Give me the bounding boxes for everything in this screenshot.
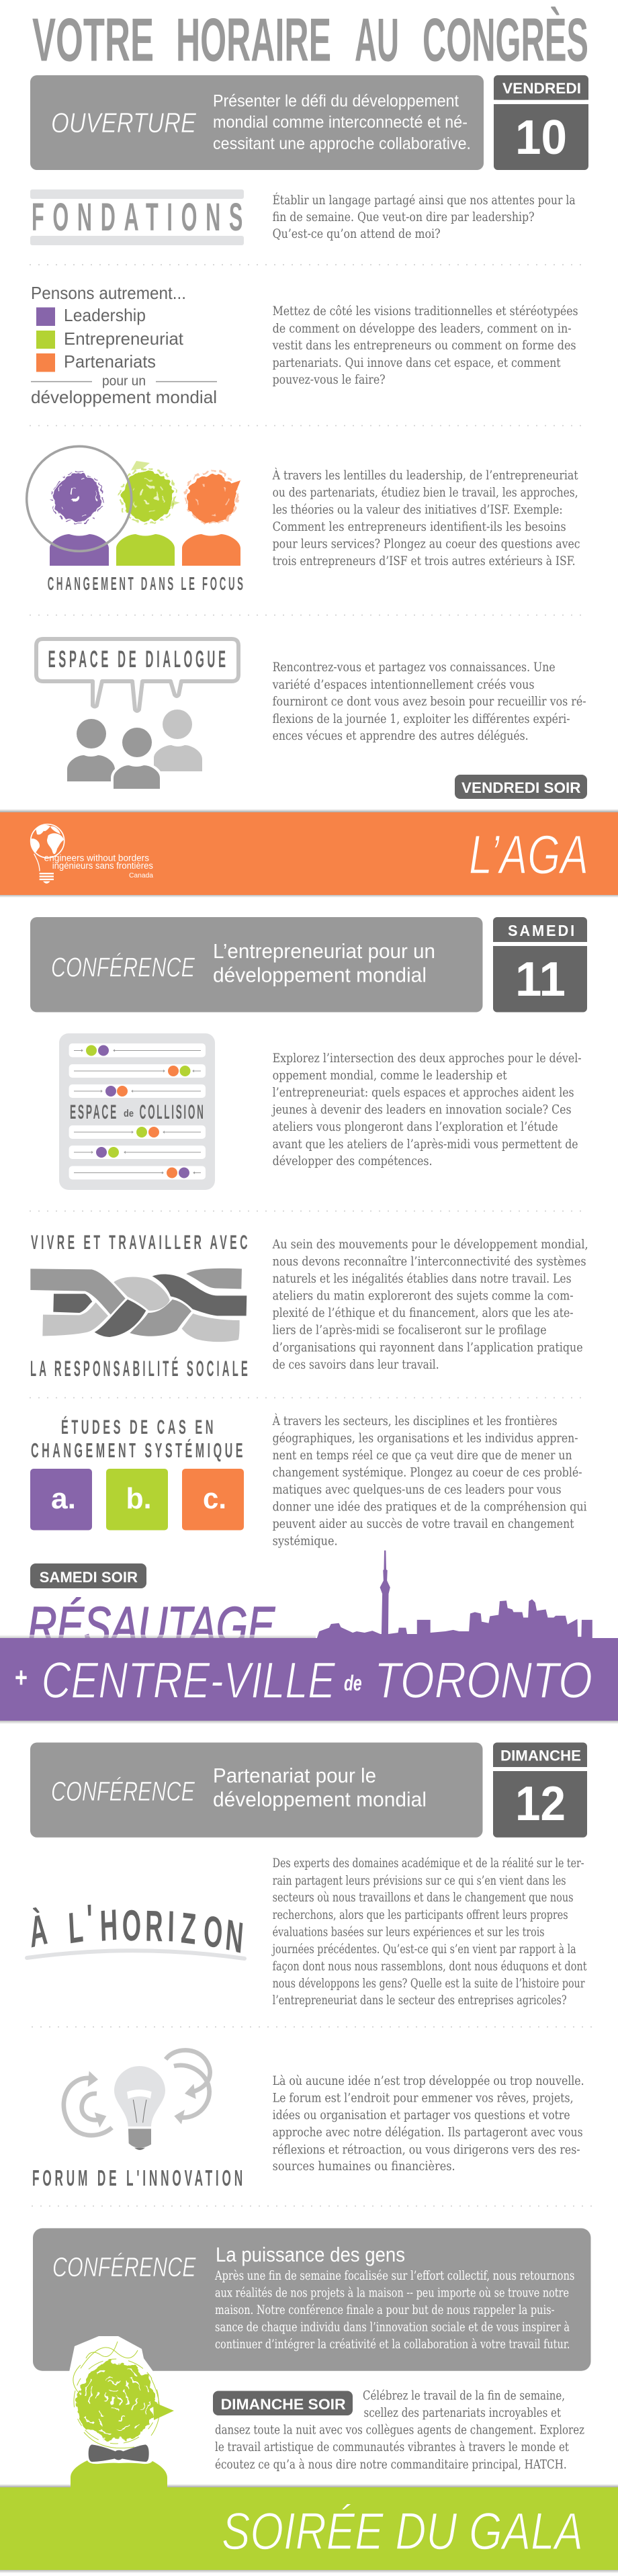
text: dimanche soir: écoutez ce qu’a à nous dire notre commanditaire principal, HATCH. xyxy=(215,2457,567,2472)
collision heading: de xyxy=(124,1108,134,1119)
panel: ouverture xyxy=(30,75,484,170)
text: responsabilité sociale: naturels et les inégalités établies dans notre travail. Les xyxy=(273,1271,572,1286)
text: forum de l'innovation: Là où aucune idée n’est trop développée ou trop nouvelle. xyxy=(273,2073,584,2088)
green body xyxy=(71,2460,167,2487)
band: centre-ville de toronto: CENTRE-VILLE xyxy=(42,1652,336,1709)
text: forum de l'innovation: Le forum est l’endroit pour emmener vos rêves, projets, xyxy=(273,2091,574,2106)
band: l'aga xyxy=(0,809,618,898)
text: à l'horizon: l’entrepreneuriat dans le secteur des entreprises agricoles? xyxy=(273,1993,567,2008)
ouverture label: OUVERTURE xyxy=(51,107,197,138)
ouverture description: mondial comme interconnecté et né- xyxy=(213,113,468,132)
date: dimanche 12: 12 xyxy=(515,1777,566,1831)
ouverture description: Présenter le défi du développement xyxy=(213,91,459,110)
text: à l'horizon: recherchons, alors que les participants offrent leurs propres xyxy=(273,1907,568,1922)
box c xyxy=(182,1469,244,1531)
purple person xyxy=(50,472,109,566)
text: responsabilité sociale: Au sein des mouvements pour le développement mondial, xyxy=(272,1237,588,1252)
legend item: partenariats: Partenariats xyxy=(64,351,156,372)
band: centre-ville de toronto: de xyxy=(344,1671,362,1695)
logo: engineers without borders xyxy=(31,824,153,884)
panel: conférence samedi xyxy=(30,917,482,1012)
text: pensons autrement: vestit dans les entrepreneurs ou comment on forme des xyxy=(272,338,576,353)
panel: la puissance des gens xyxy=(33,2228,591,2371)
text: forum de l'innovation: approche avec notre délégation. Ils partageront avec vous xyxy=(273,2125,583,2140)
badge: dimanche soir xyxy=(213,2391,353,2415)
case study boxes xyxy=(30,1469,244,1531)
collision heading: ESPACE xyxy=(70,1101,118,1123)
three people xyxy=(67,710,202,790)
focus circle xyxy=(27,446,132,551)
text: pensons autrement: pouvez-vous le faire? xyxy=(273,372,386,387)
legend: pensons autrement: développement mondial xyxy=(31,387,217,407)
conférence label: CONFÉRENCE xyxy=(51,951,195,982)
date: dimanche 12: DIMANCHE xyxy=(500,1747,581,1764)
green person xyxy=(116,461,180,566)
arrows xyxy=(64,2050,210,2135)
text: changement dans le focus: À travers les lentilles du leadership, de l’entrepreneuriat xyxy=(272,468,578,482)
text: espace de dialogue: fourniront ce dont vous avez besoin pour recueillir vos ré- xyxy=(273,694,586,709)
text: changement dans le focus: ou des partenariats, étudiez bien le travail, les approches, xyxy=(273,485,578,500)
conférence topic: L’entrepreneuriat pour un xyxy=(213,939,435,963)
text: espace de collision: jeunes à devenir des leaders en innovation sociale? Ces xyxy=(271,1102,572,1117)
text: études de cas: nent en temps réel ce que ça veut dire que de mener un xyxy=(273,1448,572,1463)
heading: études de cas: ÉTUDES DE CAS EN xyxy=(61,1416,216,1439)
text: forum de l'innovation: réflexions et rétroaction, ou vous dirigerons vers des res- xyxy=(273,2142,580,2157)
text: responsabilité sociale: ateliers du matin exploreront des sujets comme la com- xyxy=(273,1289,574,1303)
heading: résautage: RÉSAUTAGE xyxy=(28,1596,275,1656)
text: études de cas: changement systémique. Plongez au coeur de ces problé- xyxy=(273,1465,582,1479)
text: forum de l'innovation: sources humaines ou financières. xyxy=(273,2159,455,2174)
text: espace de collision: l’entrepreneuriat: quels espaces et approches aident les xyxy=(273,1085,574,1100)
heading: études de cas: CHANGEMENT SYSTÉMIQUE xyxy=(31,1439,246,1462)
legend item: entrepreneuriat: Entrepreneuriat xyxy=(64,329,184,349)
conférence topic: Partenariat pour le xyxy=(213,1764,376,1787)
text: espace de collision: ateliers vous plongeront dans l’exploration et l’étude xyxy=(273,1119,558,1134)
ouverture description: cessitant une approche collaborative. xyxy=(213,134,471,153)
text: espace de dialogue xyxy=(272,660,586,743)
heading: à l'horizon: À L'HORIZON xyxy=(28,1895,245,1963)
text: changement dans le focus: les théories ou la valeur des initiatives d’ISF. Exemple: xyxy=(273,503,563,517)
text: dimanche soir: le travail artistique de communautés vibrantes à travers le monde et xyxy=(215,2440,569,2454)
text: espace de collision: oppement mondial, comme le leadership et xyxy=(273,1068,507,1083)
legend: pensons autrement: pour un xyxy=(102,374,146,388)
text: pensons autrement: partenariats. Qui innove dans cet espace, et comment xyxy=(273,355,561,370)
heading: vivre et travailler avec: VIVRE ET TRAVAILLER AVEC xyxy=(31,1232,251,1254)
legend item: leadership xyxy=(36,305,146,326)
band: centre-ville de toronto xyxy=(0,1635,618,1724)
text: espace de collision: avant que les ateliers de l’après-midi vous permettent de xyxy=(273,1137,578,1152)
text: changement dans le focus: Comment les entrepreneurs identifient-ils les besoins xyxy=(273,519,566,534)
text: à l'horizon: évaluations basées sur leurs expériences et sur les trois xyxy=(273,1925,545,1940)
panel text: maison. Notre conférence finale a pour but de nous rappeler la puis- xyxy=(215,2303,555,2317)
text: études de cas xyxy=(272,1413,587,1549)
title: HORAIRE xyxy=(176,7,331,75)
text: dimanche soir xyxy=(215,2388,584,2472)
text: forum de l'innovation: idées ou organisation et partager vos questions et votre xyxy=(273,2108,570,2122)
scribbled head xyxy=(73,2342,174,2448)
illustration: espace de collision xyxy=(59,1033,215,1190)
date: samedi 11 xyxy=(493,917,587,1012)
legend: pensons autrement xyxy=(31,283,217,407)
panel: conférence dimanche xyxy=(30,1743,482,1838)
text: études de cas: géographiques, les organisations et les individus appren- xyxy=(273,1431,578,1446)
illustration: espace de collision: COLLISION xyxy=(140,1101,206,1123)
legend item: leadership: Leadership xyxy=(64,305,146,325)
title xyxy=(32,7,588,75)
date: vendredi 10: 10 xyxy=(515,111,567,165)
text: espace de dialogue: ences vécues et apprendre des autres délégués. xyxy=(273,728,529,743)
date: samedi 11: SAMEDI xyxy=(508,922,576,939)
text: dimanche soir: Célébrez le travail de la fin de semaine, xyxy=(363,2388,565,2403)
panel text xyxy=(214,2268,574,2352)
title: AU xyxy=(355,7,399,75)
heading: fondations: FONDATIONS xyxy=(32,196,251,239)
date: vendredi 10: VENDREDI xyxy=(502,80,581,97)
text: espace de dialogue: Rencontrez-vous et partagez vos connaissances. Une xyxy=(273,660,556,675)
text: études de cas: donner une idée des pratiques et de la compréhension qui xyxy=(273,1500,587,1514)
text: études de cas: systémique. xyxy=(273,1534,338,1549)
box a: a. xyxy=(51,1482,76,1515)
text: responsabilité sociale: d’organisations qui rayonnent dans l’application pratique xyxy=(273,1340,583,1355)
title: VOTRE xyxy=(32,7,154,75)
text: responsabilité sociale: liers de l’après-midi se focaliseront sur le profilage xyxy=(273,1323,547,1338)
text: ESPACE DE DIALOGUE xyxy=(48,646,229,673)
date: vendredi 10 xyxy=(494,75,588,170)
text: pensons autrement: de comment on développe des leaders, comment on in- xyxy=(273,321,572,336)
text: LA RESPONSABILITÉ SOCIALE xyxy=(30,1357,251,1381)
bow tie xyxy=(89,2444,149,2462)
date: samedi 11: 11 xyxy=(515,953,566,1006)
text: fondations: Établir un langage partagé ainsi que nos attentes pour la xyxy=(273,192,576,208)
conférence topic xyxy=(213,939,435,987)
text: à l'horizon: rain partagent leurs prévisions sur ce qui s’en vient dans les xyxy=(273,1873,566,1888)
text: fondations: fin de semaine. Que veut-on dire par leadership? xyxy=(273,210,535,224)
box a xyxy=(30,1469,92,1531)
date: dimanche 12 xyxy=(493,1743,587,1838)
badge: dimanche soir: DIMANCHE SOIR xyxy=(221,2396,346,2413)
badge: vendredi soir xyxy=(455,775,587,799)
text: changement dans le focus xyxy=(272,468,580,568)
conférence topic: développement mondial xyxy=(213,1788,427,1811)
logo: engineers without borders: ingénieurs sans frontières xyxy=(52,861,153,871)
heading: études de cas xyxy=(31,1416,246,1462)
heading: fondations xyxy=(30,189,251,245)
box c: c. xyxy=(203,1482,226,1515)
text: fondations xyxy=(273,192,576,241)
illustration: changement dans le focus xyxy=(27,446,240,566)
text: changement dans le focus: trois entrepreneurs d’ISF et trois autres extérieurs à ISF. xyxy=(273,554,576,568)
text: espace de dialogue: variété d’espaces intentionnellement créés vous xyxy=(272,677,535,692)
text: responsabilité sociale: plexité de l’éthique et du financement, alors que les ate- xyxy=(273,1305,574,1320)
text: forum de l'innovation xyxy=(273,2073,584,2174)
text: pensons autrement xyxy=(272,304,578,387)
illustration: espace de dialogue xyxy=(36,639,238,790)
text: changement dans le focus: pour leurs services? Plongez au coeur des questions avec xyxy=(273,536,580,551)
text: responsabilité sociale: de ces savoirs dans leur travail. xyxy=(273,1357,439,1372)
white halo xyxy=(64,2336,176,2459)
text: pensons autrement: Mettez de côté les visions traditionnelles et stéréotypées xyxy=(273,304,578,318)
text: responsabilité sociale: nous devons reconnaître l’interconnectivité des systèmes xyxy=(273,1254,586,1269)
bulb xyxy=(114,2066,165,2150)
conférence label: CONFÉRENCE xyxy=(52,2251,196,2282)
text: fondations: Qu’est-ce qu’on attend de moi? xyxy=(273,226,441,241)
icon: light bulb with arrows xyxy=(64,2050,210,2150)
text: espace de collision xyxy=(271,1051,582,1168)
text: CHANGEMENT DANS LE FOCUS xyxy=(48,573,246,594)
panel heading: La puissance des gens xyxy=(216,2243,405,2266)
logo: engineers without borders: engineers without borders xyxy=(44,853,149,863)
box b: b. xyxy=(126,1482,152,1515)
text: études de cas: peuvent aider au succès de votre travail en changement xyxy=(273,1516,574,1531)
text: études de cas: matiques avec quelques-uns de ces leaders pour vous xyxy=(273,1482,562,1497)
badge: samedi soir xyxy=(30,1563,146,1588)
conférence topic: développement mondial xyxy=(213,963,427,987)
badge: samedi soir: SAMEDI SOIR xyxy=(40,1569,138,1586)
text: espace de collision: Explorez l’intersection des deux approches pour le dével- xyxy=(273,1051,582,1066)
logo: engineers without borders: Canada xyxy=(129,871,153,879)
legend: pensons autrement: Pensons autrement... xyxy=(31,283,186,303)
ouverture description xyxy=(213,91,471,153)
illustration: gala person xyxy=(0,2336,618,2487)
text: espace de collision: développer des compétences. xyxy=(273,1154,433,1168)
box b xyxy=(106,1469,168,1531)
text: responsabilité sociale xyxy=(272,1237,588,1372)
heading: forum de l'innovation: FORUM DE L'INNOVATION xyxy=(32,2165,246,2190)
text: dimanche soir: scellez des partenariats incroyables et xyxy=(364,2405,561,2420)
band: centre-ville de toronto: + xyxy=(15,1662,28,1693)
conférence label: CONFÉRENCE xyxy=(51,1776,195,1807)
text: à l'horizon: secteurs où nous travaillons et dans le changement que nous xyxy=(273,1890,574,1905)
collision rows xyxy=(69,1043,206,1180)
text: à l'horizon xyxy=(271,1856,587,2008)
band: soirée du gala xyxy=(0,2487,618,2573)
badge: vendredi soir: VENDREDI SOIR xyxy=(461,779,581,796)
orange person xyxy=(182,471,240,566)
text: espace de dialogue: flexions de la journée 1, exploiter les différentes expéri- xyxy=(273,712,570,726)
speech bubble xyxy=(36,639,238,711)
text: études de cas: À travers les secteurs, les disciplines et les frontières xyxy=(272,1413,558,1428)
icon: braided knot xyxy=(30,1269,247,1342)
conférence topic xyxy=(213,1764,427,1811)
toronto skyline xyxy=(316,1551,592,1639)
